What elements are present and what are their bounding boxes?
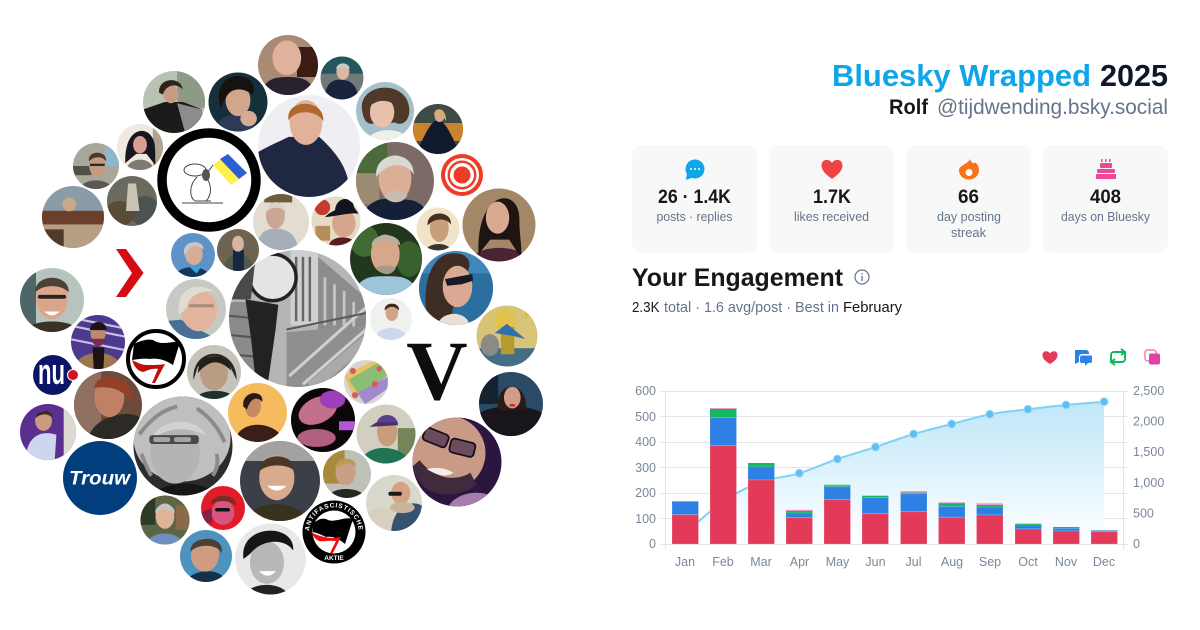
avatar: woman with long dark hair bbox=[462, 188, 536, 262]
stacked bars: likes bbox=[672, 446, 1118, 544]
icon: Antifascistische Aktie badge bbox=[302, 500, 366, 564]
panel: day posting streak: 66 bbox=[958, 187, 979, 208]
avatar: man in suit bbox=[320, 56, 364, 100]
avatar: man on purple wall bbox=[20, 404, 76, 460]
avatar: man with black hat bbox=[312, 196, 360, 246]
avatar: podcast host with beard bbox=[71, 315, 125, 369]
icon: Antifascistische Aktie badge: AKTIE bbox=[324, 555, 344, 562]
icon: red target logo bbox=[441, 154, 483, 196]
panel: days on Bluesky: 408 bbox=[1090, 187, 1121, 208]
icon: red chevron bbox=[116, 249, 144, 297]
left axis labels: 100 bbox=[635, 512, 656, 526]
avatar: young man with stubble bbox=[416, 208, 460, 250]
left axis labels: 200 bbox=[635, 486, 656, 500]
engagement summary bbox=[632, 300, 903, 316]
avatar: man with dark hair, stark light bbox=[187, 345, 241, 399]
avatar: man on blue background bbox=[180, 530, 232, 582]
avatar: man in plaid shirt before trees bbox=[140, 496, 190, 544]
left axis labels: 0 bbox=[649, 537, 656, 551]
stacked bars: replies bbox=[672, 418, 1118, 532]
month labels: Dec bbox=[1093, 555, 1115, 569]
panel: days on Bluesky: days on Bluesky bbox=[1061, 209, 1150, 224]
panel: day posting streak: streak bbox=[951, 225, 986, 240]
engagement summary: 2.3K bbox=[632, 300, 660, 316]
avatar: man in grey and black jacket bbox=[143, 71, 205, 133]
panel: likes received bbox=[769, 145, 894, 253]
icon: Trouw logo bbox=[63, 441, 137, 515]
engagement chart bbox=[635, 384, 1164, 569]
avatar: rainbow Frisian flag bbox=[344, 360, 388, 404]
month labels: Oct bbox=[1018, 555, 1038, 569]
left axis labels: 300 bbox=[635, 461, 656, 475]
avatar: bald man on dark background bbox=[258, 35, 318, 95]
user name and handle: Rolf bbox=[889, 96, 929, 119]
left axis labels: 500 bbox=[635, 410, 656, 424]
title: 2025 bbox=[1100, 59, 1168, 93]
engagement summary: total · 1.6 avg/post · Best in bbox=[664, 300, 839, 316]
avatar: painting of landscape bbox=[42, 186, 104, 249]
icon: Snoopy with Ukrainian flag bbox=[162, 133, 256, 227]
avatar: blond man in dark jacket bbox=[323, 450, 371, 498]
avatar: purple lit mirrored face bbox=[291, 388, 355, 452]
avatar: man with beard in blue shirt bbox=[350, 223, 422, 295]
panel: posts and replies: 26 · 1.4K bbox=[658, 187, 731, 208]
avatar: smiling woman with curly hair, monochrome bbox=[235, 524, 306, 594]
month labels: May bbox=[826, 555, 850, 569]
icon: quote squares bbox=[1145, 350, 1160, 364]
engagement summary: February bbox=[843, 300, 903, 316]
avatar: blue sky man with grey hair bbox=[171, 233, 215, 277]
avatar: curly haired man with hand on chin bbox=[208, 72, 268, 132]
right axis labels bbox=[1133, 384, 1164, 551]
chart legend bbox=[1042, 349, 1160, 366]
avatar: smiling man in sweater bbox=[240, 441, 320, 521]
panel: posts and replies: posts · replies bbox=[656, 209, 733, 224]
avatar: red lit figure with sunglasses bbox=[201, 486, 245, 530]
avatar: rock formation bbox=[104, 176, 160, 226]
icon: Trouw logo: Trouw bbox=[69, 468, 131, 489]
icon: likes heart bbox=[1042, 351, 1058, 364]
right axis labels: 0 bbox=[1133, 537, 1140, 551]
panel: days on Bluesky bbox=[1043, 145, 1168, 253]
month labels: Jun bbox=[865, 555, 886, 569]
panel: posts and replies bbox=[632, 145, 757, 253]
heading: Your Engagement: Your Engagement bbox=[632, 264, 844, 292]
icon: NU.nl logo: nu bbox=[38, 351, 65, 392]
stacked bars: reposts bbox=[710, 409, 1080, 528]
avatar: purple cap man in green shirt bbox=[356, 404, 416, 464]
panel: day posting streak bbox=[906, 145, 1031, 253]
right axis labels: 500 bbox=[1133, 506, 1154, 520]
avatar: man on yellow background bbox=[228, 383, 287, 442]
month labels: Aug bbox=[941, 555, 963, 569]
right axis labels: 1,000 bbox=[1133, 476, 1164, 490]
avatar: man before bookshelf bbox=[217, 229, 259, 271]
icon: heart bbox=[822, 160, 842, 179]
avatar: smiling man with glasses bbox=[20, 268, 84, 332]
line markers bbox=[795, 398, 1108, 477]
cumulative line bbox=[685, 402, 1104, 534]
logo: serif V: V bbox=[406, 324, 468, 418]
right axis labels: 2,500 bbox=[1133, 384, 1164, 398]
avatar: woman with curly brown hair bbox=[356, 82, 414, 140]
left axis labels bbox=[635, 384, 656, 551]
month labels: Mar bbox=[750, 555, 772, 569]
avatar: grey curly woman in black and white bbox=[134, 395, 232, 496]
panel: likes received: likes received bbox=[794, 209, 869, 224]
icon: repost arrows bbox=[1111, 349, 1125, 365]
icon: birthday cake bbox=[1096, 159, 1116, 179]
avatar: blonde woman on orange bench bbox=[413, 104, 463, 154]
left axis labels: 400 bbox=[635, 435, 656, 449]
icon: flame bbox=[959, 159, 979, 180]
avatar: black and white clock photo bbox=[229, 250, 366, 387]
avatar: large young man in navy sweater bbox=[258, 95, 360, 197]
icon: info bbox=[855, 270, 869, 284]
month labels: Jul bbox=[906, 555, 921, 569]
avatar: woman in dark sweater bbox=[479, 372, 543, 436]
month labels: Jan bbox=[675, 555, 695, 569]
right axis labels: 2,000 bbox=[1133, 414, 1164, 428]
stacked bars: quotes bbox=[710, 408, 1003, 511]
month labels: Sep bbox=[979, 555, 1001, 569]
icon: replies bubbles bbox=[1075, 350, 1092, 366]
icon: speech bubble bbox=[686, 160, 704, 180]
grid lines bbox=[660, 391, 1128, 549]
user name and handle: @tijdwending.bsky.social bbox=[937, 96, 1168, 119]
left axis labels: 600 bbox=[635, 384, 656, 398]
avatar: woman with sunglasses by the sea bbox=[419, 251, 493, 325]
avatar: man with glasses in office bbox=[73, 143, 119, 189]
avatar: grey haired man with glasses near brick wall bbox=[356, 142, 434, 220]
avatar: older man in grey shirt bbox=[253, 194, 309, 250]
avatar: older man with white hair and glasses bbox=[166, 279, 226, 339]
avatar: bald man with glasses close-up bbox=[411, 416, 502, 506]
month labels: Nov bbox=[1055, 555, 1078, 569]
icon: antifa flag logo bbox=[128, 331, 184, 387]
month labels: Apr bbox=[790, 555, 809, 569]
month labels: Feb bbox=[712, 555, 734, 569]
avatar: man in light blue shirt bbox=[370, 298, 412, 340]
panel: day posting streak: day posting bbox=[937, 209, 1001, 224]
avatar: man with red hair bbox=[74, 371, 142, 439]
icon: Antifascistische Aktie badge: ANTIFASCISTISCHE bbox=[305, 503, 364, 531]
cumulative area bbox=[685, 402, 1104, 544]
avatar: Ukrainian warrior artwork bbox=[476, 306, 538, 366]
month labels bbox=[675, 555, 1115, 569]
panel: likes received: 1.7K bbox=[813, 187, 851, 208]
title: Bluesky Wrapped bbox=[832, 59, 1091, 93]
avatar: woman with dark hair bbox=[117, 124, 163, 170]
avatar: bald man with sunglasses bbox=[366, 475, 422, 531]
right axis labels: 1,500 bbox=[1133, 445, 1164, 459]
avatar cloud bbox=[20, 35, 543, 594]
